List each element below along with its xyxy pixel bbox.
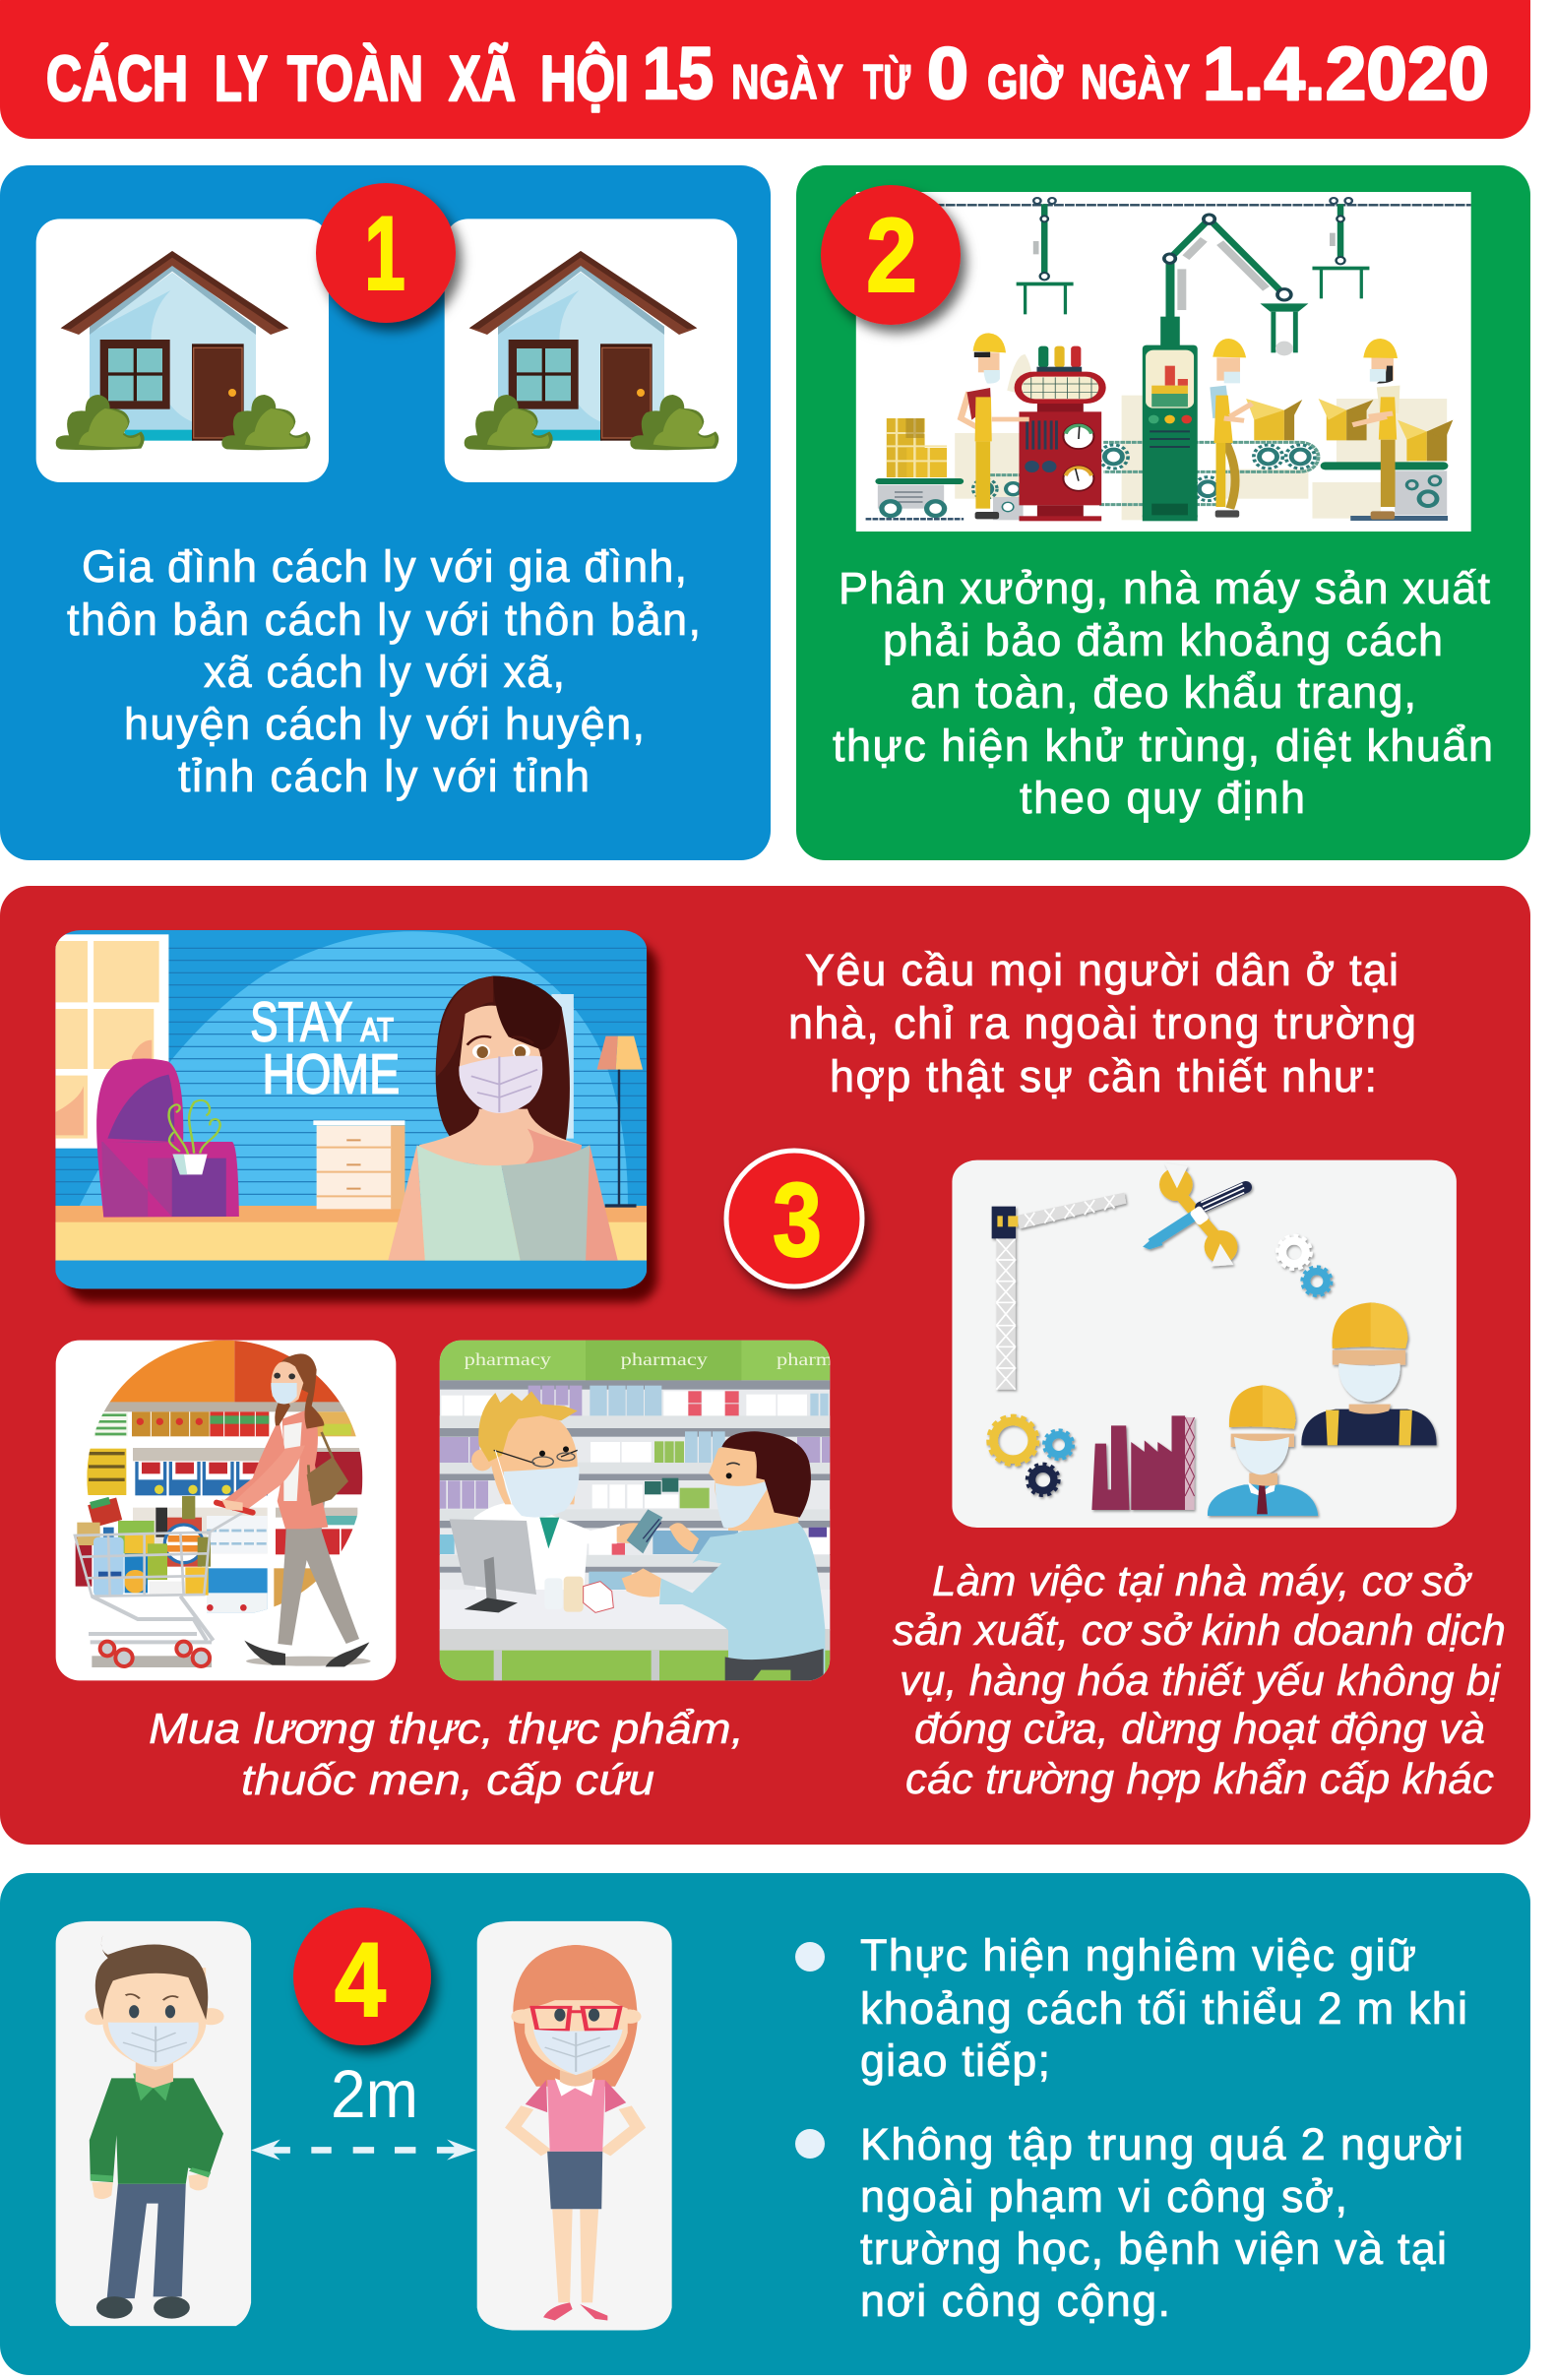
text: panel 2 description: theo quy định: [1020, 773, 1305, 823]
bullet: keep distance: [795, 1930, 1467, 2086]
number badge 2: [821, 185, 961, 325]
text: essential work caption: vụ, hàng hóa thiết yếu không bị: [900, 1657, 1501, 1705]
text: essential work caption: đóng cửa, dừng hoạt động và: [914, 1705, 1485, 1753]
text: stay at home instruction: Yêu cầu mọi người dân ở tại: [805, 945, 1399, 995]
label: stay at home lettering: STAY: [250, 991, 352, 1053]
text: essential work caption: [893, 1557, 1506, 1803]
heading text: 0: [927, 32, 968, 114]
card: woman: [477, 1921, 672, 2330]
number badge 3: [726, 1151, 862, 1286]
panel 3: stay at home: [0, 886, 1530, 1845]
text: food and medicine caption: [149, 1705, 744, 1804]
text: panel 1 description: Gia đình cách ly với gia đình,: [82, 541, 687, 592]
text: panel 2 description: Phân xưởng, nhà máy sản xuất: [839, 563, 1490, 613]
heading text: CÁCH: [46, 42, 188, 114]
heading text: NGÀY: [1081, 56, 1190, 109]
heading text: TỪ: [863, 55, 910, 109]
panel 2: factories: [796, 165, 1530, 860]
card: man: [56, 1921, 251, 2326]
text: stay at home instruction: hợp thật sự cần thiết như:: [830, 1051, 1377, 1101]
text: panel 1 description: huyện cách ly với huyện,: [124, 699, 645, 749]
bullet: no gatherings: trường học, bệnh viện và tại: [860, 2223, 1447, 2274]
text: food and medicine caption: Mua lương thực, thực phẩm,: [149, 1705, 744, 1753]
text: panel 2 description: thực hiện khử trùng, diệt khuẩn: [833, 720, 1493, 771]
text: essential work caption: sản xuất, cơ sở kinh doanh dịch: [893, 1606, 1506, 1655]
bullet: no gatherings: Không tập trung quá 2 người: [860, 2119, 1463, 2169]
heading text: 1.4.2020: [1203, 32, 1489, 116]
number badge 4: 4: [335, 1920, 386, 2038]
heading text: [46, 32, 1489, 116]
customer: [622, 1431, 825, 1680]
heading text: HỘI: [540, 42, 629, 114]
pharmacist: [471, 1391, 642, 1590]
illustration: stay at home: [55, 930, 648, 1289]
number badge 2: 2: [866, 196, 917, 314]
illustration: man and woman 2 metres apart: [55, 1921, 672, 2331]
panel 1: isolation between households: [0, 165, 771, 860]
label: pharmacy shop signs: pharmacy: [777, 1349, 863, 1369]
bullet: no gatherings: ngoài phạm vi công sở,: [860, 2171, 1347, 2222]
bullet: keep distance: Thực hiện nghiêm việc giữ: [860, 1930, 1416, 1980]
number badge 1: [316, 183, 456, 323]
panel 4: social distancing: [0, 1873, 1530, 2375]
shadow of stay at home card: [67, 943, 657, 1302]
text: essential work caption: các trường hợp khẩn cấp khác: [905, 1755, 1494, 1803]
number badge 3: 3: [773, 1160, 822, 1279]
arrow: 2 metre distance: [251, 2140, 476, 2161]
illustration: pharmacy: [439, 1341, 831, 1681]
text: panel 2 description: phải bảo đảm khoảng cách: [883, 615, 1443, 665]
text: food and medicine caption: thuốc men, cấp cứu: [241, 1756, 654, 1804]
heading text: LY: [215, 42, 268, 114]
label: stay at home lettering: AT: [361, 1011, 394, 1047]
illustration: grocery shopping: [55, 1341, 396, 1681]
text: essential work caption: Làm việc tại nhà máy, cơ sở: [932, 1557, 1472, 1605]
heading text: TOÀN: [287, 42, 423, 114]
text: stay at home instruction: nhà, chỉ ra ngoài trong trường: [788, 998, 1416, 1048]
label: pharmacy shop signs: [465, 1352, 831, 1369]
illustration: factory production line: [856, 192, 1471, 532]
label: pharmacy shop signs: pharmacy: [621, 1349, 708, 1369]
text: panel 1 description: [67, 541, 701, 801]
label: stay at home lettering: HOME: [263, 1044, 400, 1105]
bullet: keep distance: giao tiếp;: [860, 2036, 1050, 2086]
heading text: NGÀY: [731, 56, 843, 109]
computer monitor: [450, 1519, 536, 1612]
heading text: GIỜ: [987, 55, 1063, 109]
text: panel 2 description: an toàn, đeo khẩu trang,: [910, 667, 1416, 718]
label: 2m distance: 2m: [331, 2056, 418, 2132]
bullet: no gatherings: [795, 2119, 1463, 2326]
icon: house card left: [35, 219, 329, 482]
illustration: work sites: [952, 1159, 1457, 1528]
bullet: no gatherings: nơi công cộng.: [860, 2276, 1170, 2326]
icon: house card right: [445, 219, 737, 482]
text: panel 1 description: tỉnh cách ly với tỉnh: [178, 751, 590, 801]
number badge 1: 1: [364, 194, 405, 312]
heading text: XÃ: [449, 42, 516, 114]
title banner: [0, 0, 1530, 139]
text: panel 1 description: xã cách ly với xã,: [204, 647, 565, 697]
text: panel 1 description: thôn bản cách ly với thôn bản,: [67, 595, 701, 645]
text: panel 2 description: [833, 563, 1493, 823]
text: stay at home instruction: [788, 945, 1416, 1101]
bullet: keep distance: khoảng cách tối thiểu 2 m khi: [860, 1983, 1467, 2034]
label: stay at home lettering: [251, 1001, 399, 1095]
number badge 4: [293, 1908, 431, 2045]
heading text: 15: [643, 32, 714, 114]
label: pharmacy shop signs: pharmacy: [465, 1349, 551, 1369]
